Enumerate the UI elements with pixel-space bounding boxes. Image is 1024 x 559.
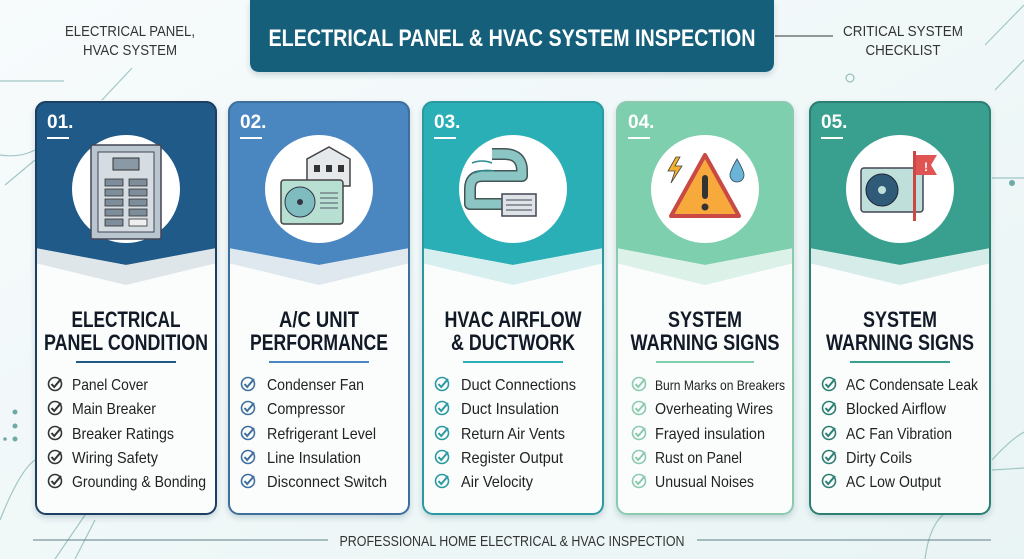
top-right caption: CHECKLIST: [866, 42, 940, 59]
icon: AC unit and house: [265, 135, 373, 243]
checklist: [822, 377, 979, 491]
panel 1: electrical panel condition: [35, 101, 217, 515]
icon: AC unit with red flag: [846, 135, 954, 243]
top-left caption: HVAC SYSTEM: [83, 42, 177, 59]
heading: PERFORMANCE: [250, 330, 388, 355]
checklist: Main Breaker: [72, 401, 157, 418]
icon: AC unit with red flag: !: [924, 160, 928, 174]
number 01: 01.: [47, 112, 73, 133]
checklist: Air Velocity: [461, 474, 533, 491]
checklist: [242, 377, 387, 491]
top-left caption: ELECTRICAL PANEL,: [65, 23, 195, 40]
checklist: Burn Marks on Breakers: [655, 377, 785, 393]
top-right caption: CRITICAL SYSTEM: [843, 23, 963, 40]
checklist: Blocked Airflow: [846, 401, 946, 418]
panel 5: system warning signs (AC): [809, 101, 991, 515]
checklist: Line Insulation: [267, 450, 361, 467]
checklist: Panel Cover: [72, 377, 149, 394]
title banner: ELECTRICAL PANEL & HVAC SYSTEM INSPECTION: [268, 25, 756, 52]
heading: ELECTRICAL: [72, 307, 180, 332]
number 03: 03.: [434, 112, 460, 133]
top-right caption: [775, 23, 963, 59]
icon: breaker panel: [72, 135, 180, 243]
checklist: Condenser Fan: [267, 377, 364, 394]
panel 4: system warning signs (electrical): [616, 101, 794, 515]
number 04: 04.: [628, 112, 654, 133]
panel 2: A/C unit performance: [228, 101, 410, 515]
top-left caption: [65, 23, 195, 59]
checklist: Dirty Coils: [846, 450, 912, 467]
title banner: [250, 0, 774, 72]
heading: [444, 307, 582, 355]
heading: [826, 307, 974, 355]
checklist: AC Fan Vibration: [846, 426, 952, 443]
heading: A/C UNIT: [279, 307, 359, 332]
panel 3: HVAC airflow & ductwork: [422, 101, 604, 515]
checklist: AC Condensate Leak: [846, 377, 979, 394]
icon: warning triangle: [651, 135, 759, 243]
checklist: Unusual Noises: [655, 474, 754, 491]
checklist: Rust on Panel: [655, 450, 742, 467]
checklist: [436, 377, 576, 491]
heading: [630, 307, 780, 355]
heading: WARNING SIGNS: [630, 330, 780, 355]
checklist: Wiring Safety: [72, 450, 158, 467]
checklist: Register Output: [461, 450, 563, 467]
heading: PANEL CONDITION: [44, 330, 208, 355]
icon: ducts: [459, 135, 567, 243]
heading: WARNING SIGNS: [826, 330, 974, 355]
footer: PROFESSIONAL HOME ELECTRICAL & HVAC INSPECTION: [340, 533, 684, 550]
number 05: 05.: [821, 112, 847, 133]
checklist: Disconnect Switch: [267, 474, 387, 491]
heading: [250, 307, 388, 355]
checklist: Duct Connections: [461, 377, 576, 394]
checklist: Overheating Wires: [655, 401, 773, 418]
checklist: Refrigerant Level: [267, 426, 376, 443]
heading: SYSTEM: [863, 307, 937, 332]
checklist: Breaker Ratings: [72, 426, 174, 443]
checklist: Frayed insulation: [655, 426, 765, 443]
heading: [44, 307, 208, 355]
heading: & DUCTWORK: [451, 330, 575, 355]
heading: SYSTEM: [668, 307, 742, 332]
checklist: AC Low Output: [846, 474, 941, 491]
number 02: 02.: [240, 112, 266, 133]
checklist: [48, 377, 206, 491]
checklist: Duct Insulation: [461, 401, 559, 418]
checklist: Return Air Vents: [461, 426, 565, 443]
heading: HVAC AIRFLOW: [444, 307, 582, 332]
checklist: Compressor: [267, 401, 346, 418]
checklist: [632, 377, 785, 491]
checklist: Grounding & Bonding: [72, 474, 206, 491]
